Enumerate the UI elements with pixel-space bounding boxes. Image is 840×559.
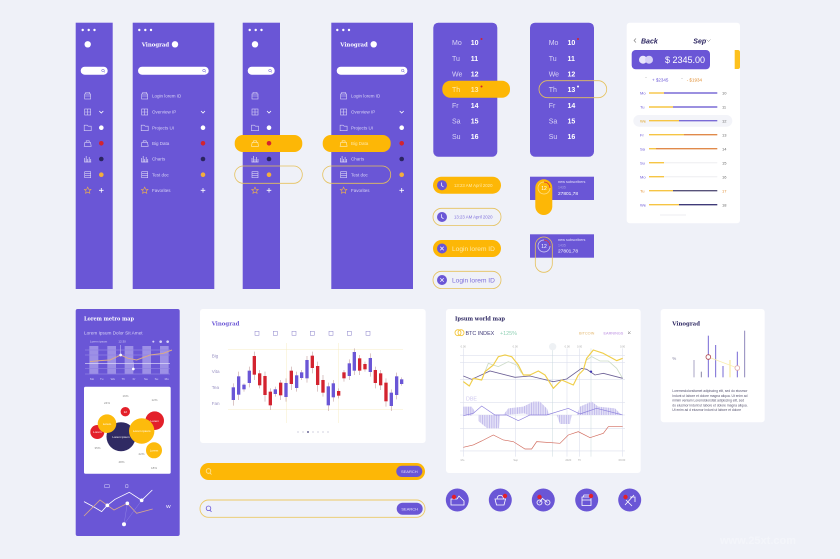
panel: calendar with outlined highlight: Su [549,134,557,141]
card: subscribers with filled pill [530,177,594,215]
panel: calendar with outlined highlight [530,23,607,157]
chart: striped area line chart: Sa [144,377,148,381]
panel: calendar with outlined highlight: 11 [568,56,575,63]
chart: bubble chart: 22% [138,452,145,456]
panel: calendar with filled highlight: Th [452,87,460,94]
panel: world map line chart: Ipsum world map [455,316,505,322]
chart: bubble chart: 24% [104,401,110,405]
panel: calendar with filled highlight [433,23,510,157]
chart: striped area line chart: Su [155,377,159,381]
panel: expanded sidebar: Big Data [152,141,170,146]
button: filled date pill [433,177,501,194]
icon: round button with box [575,488,598,512]
chart: bubble chart: 35% [94,446,101,450]
panel: calendar with filled highlight: 16 [471,134,479,141]
panel: expanded sidebar with pill states: Favorites [351,188,370,193]
icon: round button with rocket [618,488,641,512]
card: subscribers with filled pill: 1435 [558,186,566,190]
panel: wallet budget card: Fr [640,132,644,137]
panel: expanded sidebar: Overview IP [152,110,176,115]
panel: calendar with filled highlight: 12 [471,72,479,78]
panel: wallet budget card: 10 [722,90,727,96]
chart: bubble chart: Lorem [150,419,159,423]
chart: bubble chart: 16% [122,394,129,398]
panel: world map line chart: BTC INDEX [466,331,495,337]
button: outlined date pill [433,208,501,226]
chart: bubble chart: 48% [118,460,125,464]
panel: candlestick chart: Vinograd [211,322,239,328]
panel: world map line chart: 09:00 [619,458,626,462]
panel: wallet budget card: Tu [640,104,645,110]
panel: wallet budget card: 16 [722,174,727,179]
panel: calendar with outlined highlight: We [549,72,559,78]
panel: expanded sidebar: Favorites [152,188,171,193]
panel: world map line chart: EARNINGS [604,332,624,336]
chart: striped area line chart: Mo [90,377,94,381]
chart: striped area line chart: 12:30 [118,340,126,344]
panel: wallet budget card: 13 [722,132,727,137]
panel: world map line chart: DBE [466,397,477,403]
panel: calendar with filled highlight: We [452,72,462,78]
panel: world map line chart: 0.00 [513,345,518,349]
panel: collapsed sidebar with pill states [235,23,302,289]
panel: expanded sidebar: Test doc [152,172,170,177]
button: outlined login pill [433,271,501,289]
panel: expanded sidebar: Login lorem ID [152,94,182,99]
panel: expanded sidebar: Vinograd [141,42,169,48]
card: subscribers with outlined pill: new subscribers [558,238,586,242]
search bar: outlined: SEARCH [401,506,418,511]
chart: bottom route lines [84,485,171,526]
chart: bubble chart: Lorem ipsum [112,435,130,439]
panel: candlestick chart: Big [212,354,219,358]
panel: wallet budget card: We [640,202,647,207]
panel: calendar with filled highlight: Fr [452,103,459,110]
search bar: outlined [200,500,425,517]
card: subscribers with filled pill: 12 [541,186,547,192]
chart: striped area line chart: Lorem ipsum [90,340,108,344]
chart: bubble chart: Lorem [150,448,159,452]
panel: wallet budget card: Tu [640,188,645,193]
panel: expanded sidebar with pill states: Charts [351,157,365,162]
panel: bar and text card: % [672,356,676,361]
panel: wallet budget card: Sa [640,146,646,151]
panel: expanded sidebar with pill states: Big Data [351,141,369,146]
chart: striped area line chart: Tu [100,377,104,381]
chart: striped area line chart: Fr [133,377,135,381]
icon: round button with truck [446,488,469,512]
search bar: filled [200,463,425,480]
chart: bubble chart: 18% [151,466,157,470]
chart: bubble chart [84,387,171,474]
panel: calendar with filled highlight: 11 [471,56,478,63]
panel: calendar with outlined highlight: Mo [549,40,559,47]
panel: expanded sidebar: Projects UI [152,125,174,130]
panel: expanded sidebar [133,23,214,289]
panel: bar and text card: Ut enim ad d eiusmor indunt ut labore et dolore [672,408,741,412]
panel: wallet budget card: 15 [722,160,727,165]
chart: bottom route lines: W [166,504,171,510]
chart: bubble chart: 12 [124,410,127,414]
panel: calendar with filled highlight: Tu [452,56,460,63]
chart: bubble chart: Lorem [93,430,102,434]
panel: calendar with outlined highlight: 14 [568,103,575,110]
panel: wallet budget card: 11 [722,104,727,110]
panel: calendar with filled highlight: Su [452,134,461,141]
panel: world map line chart: 0.00 [577,345,583,349]
button: outlined date pill: 13:23 AM April 2020 [454,215,493,220]
panel: metro map: Lorem Ipsum Dolor Sit Amet [84,330,143,336]
panel: wallet budget card: - $1934 [687,78,702,83]
card: subscribers with filled pill: new subscribers [558,180,586,184]
panel: world map line chart: 0.00 [620,345,626,349]
panel: world map line chart [446,309,641,473]
panel: calendar with filled highlight: 10 [471,40,479,47]
chart: striped area line chart: We [111,377,115,381]
chart: striped area line chart [85,340,172,381]
panel: wallet budget card: Su [640,160,645,165]
panel: bar and text card: Loremmdolorsitamet adipiscing elit, sed do eiusmor [672,389,748,393]
panel: world map line chart: +125% [500,331,517,337]
panel: wallet budget card: Mo [640,90,646,96]
panel: metro map [76,309,180,536]
panel: expanded sidebar with pill states: Login lorem ID [351,94,381,99]
icon: round button with bicycle [532,488,555,512]
chart: striped area line chart: Th [122,377,125,381]
panel: wallet budget card: We [640,118,647,123]
panel: wallet budget card: 14 [722,146,727,151]
panel: wallet budget card: + $2345 [652,78,669,83]
card: subscribers with outlined pill: 12 [541,244,547,250]
panel: calendar with outlined highlight: Tu [549,56,557,63]
panel: candlestick chart: Fan [212,401,220,406]
panel: expanded sidebar with pill states [323,23,413,289]
panel: world map line chart: 0.00 [461,345,466,349]
panel: bar and text card: Vinograd [671,322,700,328]
panel: calendar with filled highlight: 13 [471,87,479,94]
panel: world map line chart: 2020 [565,458,572,462]
panel: calendar with outlined highlight: 12 [568,72,575,78]
panel: wallet budget card: 18 [722,202,727,207]
panel: expanded sidebar with pill states: Projects UI [351,125,373,130]
panel: calendar with outlined highlight: 16 [568,134,575,141]
button: filled login pill [433,240,501,257]
button: filled date pill: 13:23 AM April 2020 [454,183,493,188]
panel: wallet budget card: 12 [722,118,727,123]
panel: calendar with outlined highlight: 13 [568,87,575,94]
panel: wallet budget card: $ 2345.00 [665,55,705,65]
search bar: filled: SEARCH [401,469,418,474]
card: subscribers with outlined pill: 1435 [558,244,566,248]
panel: world map line chart: Th [578,458,582,462]
panel: candlestick chart: Tea [212,385,220,390]
panel: bar and text card: Indunt ut labore et dolore magna aliqua. Ut enim ad [672,394,748,398]
panel: candlestick chart [200,309,426,443]
button: outlined login pill: Login lorem ID [452,278,495,284]
panel: calendar with outlined highlight: 10 [568,40,575,47]
card: subscribers with outlined pill: 27801,78 [558,248,578,254]
panel: calendar with outlined highlight: 15 [568,118,575,126]
watermark: www.25xt.com [719,535,796,547]
panel: world map line chart: 0.00 [565,345,570,349]
panel: bar and text card [661,309,765,422]
panel: expanded sidebar with pill states: Overview IP [351,110,375,115]
panel: calendar with filled highlight: Mo [452,40,462,47]
panel: world map line chart: BITCOIN [579,332,595,336]
panel: wallet budget card: Sep [693,38,707,45]
panel: calendar with filled highlight: 15 [471,118,479,126]
panel: calendar with outlined highlight: Th [549,87,557,94]
card: subscribers with outlined pill [530,234,594,272]
panel: world map line chart: Mo [461,458,465,462]
icon: round button with basket [489,488,512,512]
panel: calendar with outlined highlight: Fr [549,103,556,110]
panel: candlestick chart: Vita [212,369,220,374]
panel: collapsed sidebar [76,23,113,289]
panel: wallet budget card: 17 [722,188,727,193]
chart: bubble chart: Lorem [103,422,112,426]
card: subscribers with filled pill: 27801,78 [558,191,578,197]
button: filled login pill: Login lorem ID [452,246,495,253]
panel: calendar with outlined highlight: Sa [549,118,557,126]
panel: wallet budget card [627,23,740,223]
panel: expanded sidebar with pill states: Vinograd [339,42,368,48]
panel: bar and text card: do eiusmor indunt ut labore et dolore magna aliqua. [672,403,748,407]
panel: wallet budget card: Back [641,38,659,45]
panel: metro map: Lorem metro map [84,316,134,322]
panel: calendar with filled highlight: 14 [471,103,479,110]
panel: expanded sidebar with pill states: Test doc [351,172,369,177]
panel: wallet budget card: Mo [640,174,646,179]
panel: expanded sidebar: Charts [152,157,166,162]
panel: calendar with filled highlight: Sa [452,118,461,126]
chart: bubble chart: 12% [151,398,158,402]
panel: world map line chart: Sep [513,458,519,462]
chart: bubble chart: Lorem ipsum [133,429,151,433]
panel: bar and text card: minim veniam Loremdolorsitat adipiscing elit, sed [672,399,744,403]
chart: striped area line chart: Mo [165,377,169,381]
